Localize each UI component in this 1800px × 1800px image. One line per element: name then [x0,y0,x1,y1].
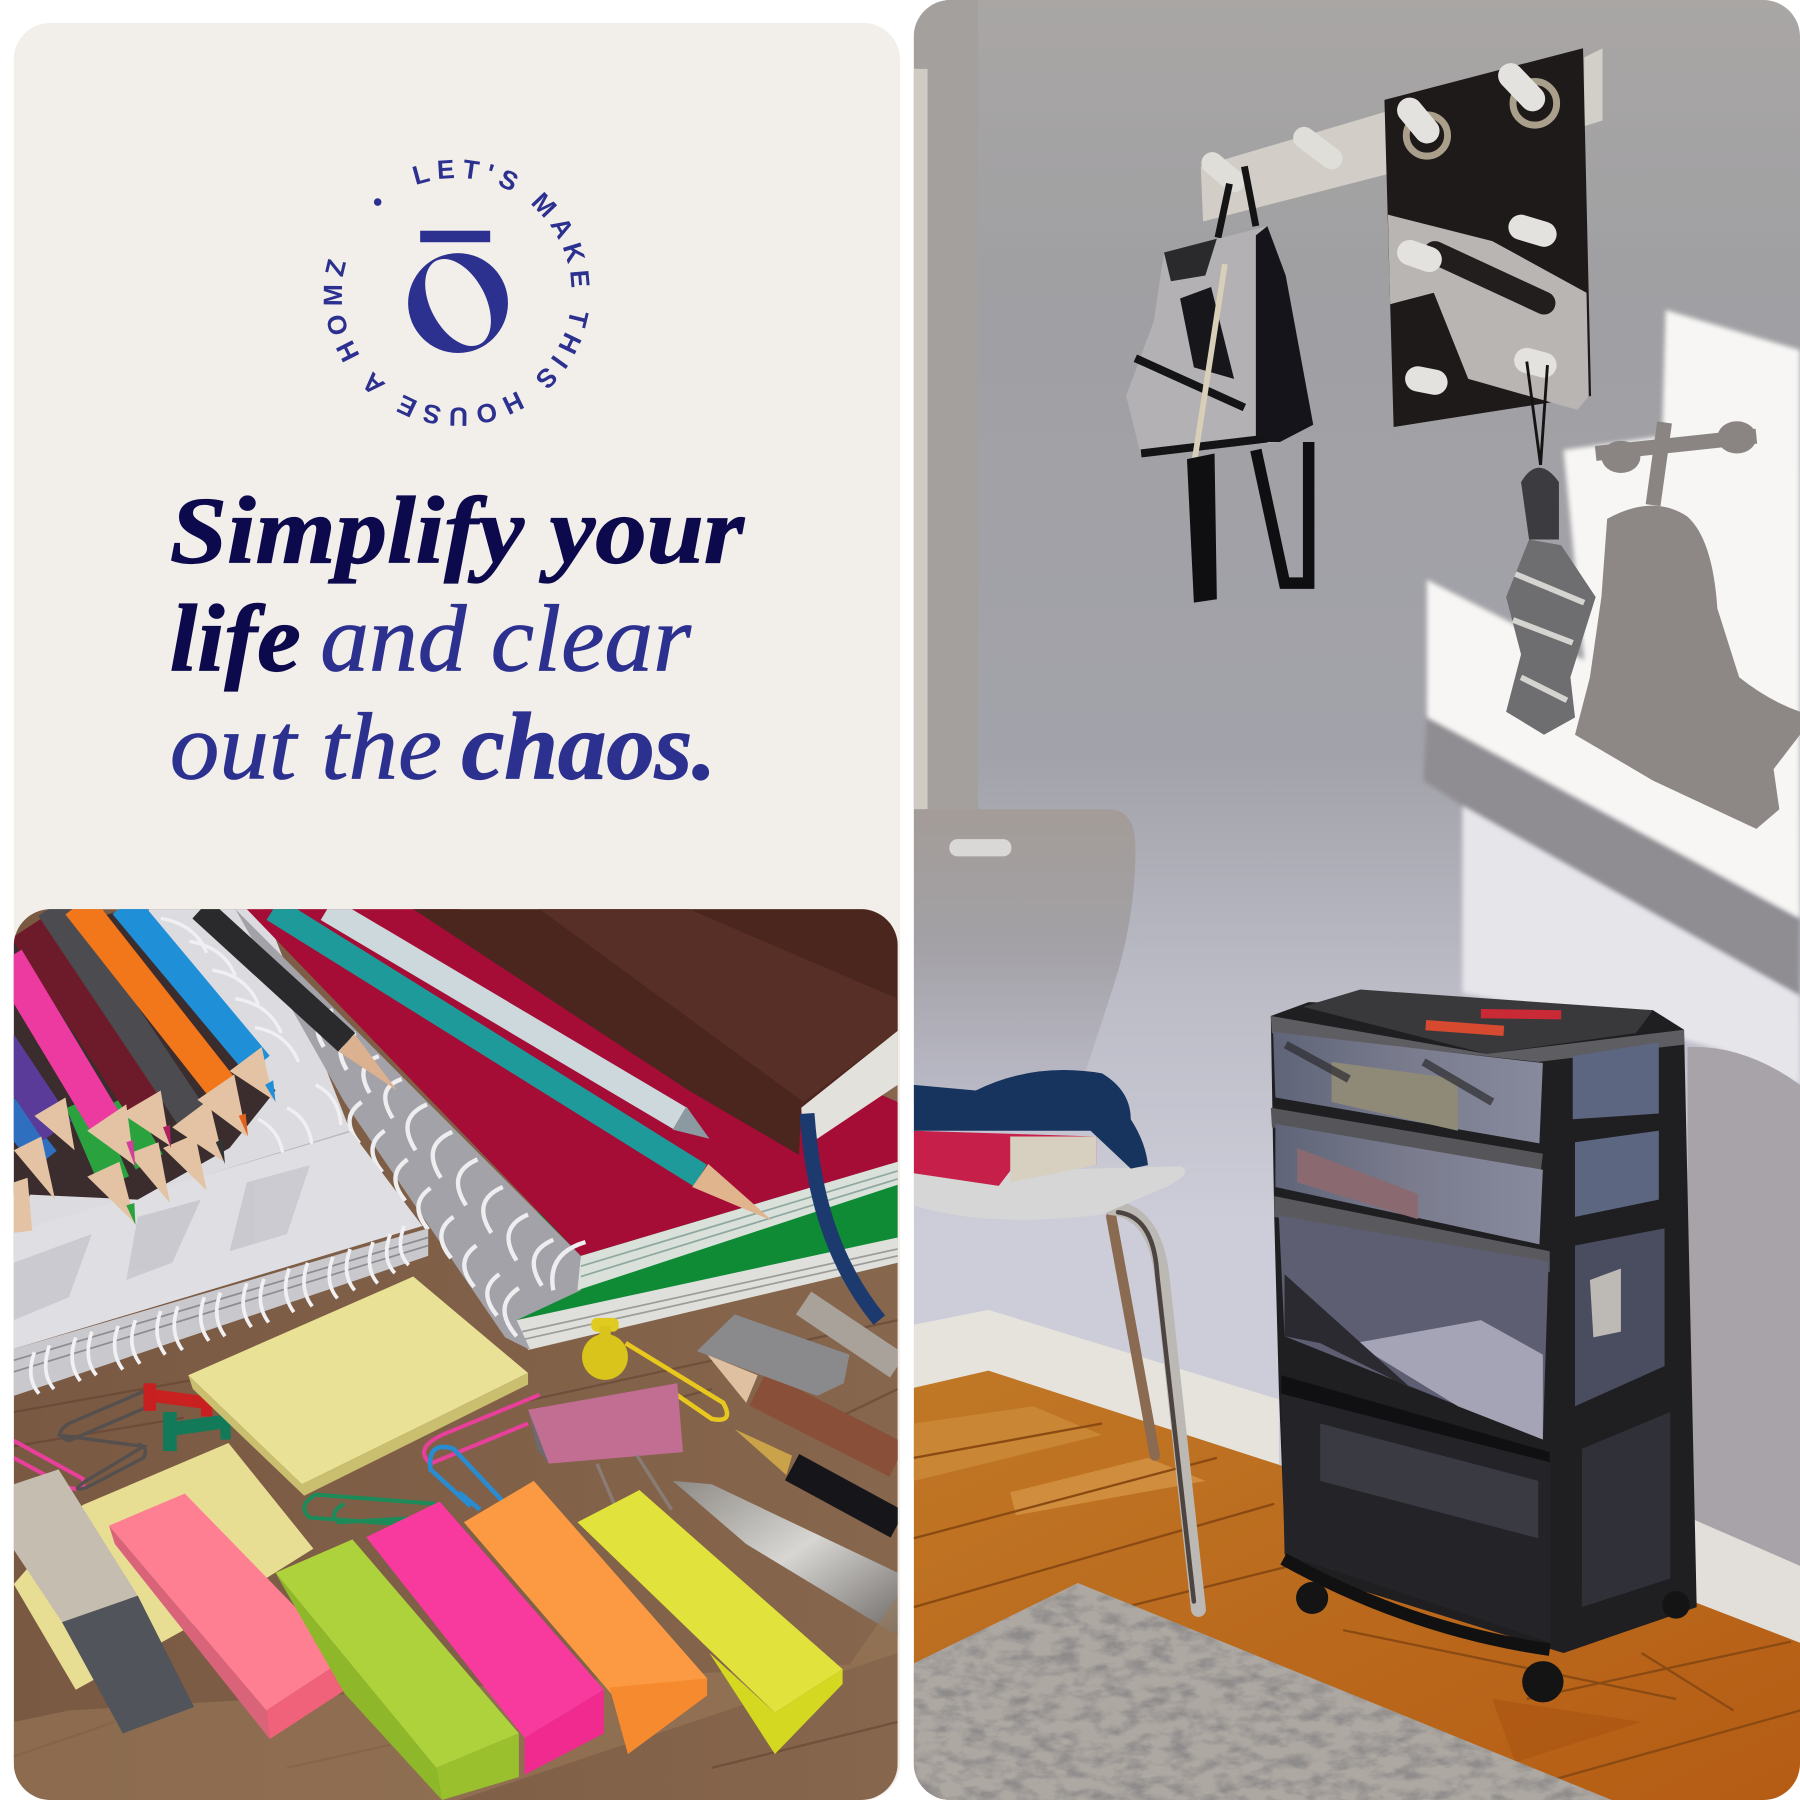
green push pin [163,1410,231,1451]
logo dot separator [374,198,381,206]
front white notebook [14,1132,428,1396]
headline line 2 regular: and clear [320,585,692,691]
silver pen [673,1481,898,1636]
blue paperclip [430,1447,505,1510]
wall [914,0,1800,1800]
white pen [327,909,709,1139]
headline line 2 bold: life [170,585,301,691]
panel: cream text card [14,23,900,1800]
yellow sticky pad [188,1277,528,1496]
drawer one [1273,1032,1543,1143]
door frame at left [914,0,978,809]
pencil sharpener [697,1314,849,1396]
spiral wire under pencils [161,918,341,1159]
headline [170,477,745,799]
floor plank lines [914,1423,1800,1800]
dark gap behind pencils [14,909,276,1200]
front notebook spiral [31,1226,409,1394]
pink binder clip [528,1383,683,1510]
side window four [1582,1412,1670,1607]
hook shadow on wall [1596,421,1756,505]
pencil bodies [0,905,258,1182]
red book [914,1131,1096,1186]
colored pencils bundle [0,905,276,1233]
pink sticky flag [109,1493,346,1739]
plastic drawer cart [1271,990,1697,1702]
cart base rail [1283,1559,1550,1650]
blue knit scarf [914,1070,1148,1169]
photo: room corner with storage cart [914,0,1800,1800]
pink large paperclip [424,1395,540,1464]
black pencil [201,909,397,1091]
chair legs [1111,1208,1198,1609]
drawer two [1271,1108,1543,1244]
chair handle slot [949,839,1011,856]
navy ribbon [807,1114,879,1320]
yellow sticky flag [577,1490,843,1754]
brown pencil [707,1355,898,1460]
rack pegs [1212,138,1332,181]
baseboard left [914,1310,1279,1465]
chair back [914,809,1135,1108]
black backpack [1126,166,1313,603]
black pen [735,1429,898,1524]
green paperclip [304,1495,436,1527]
folded umbrella [1506,362,1596,735]
sunlight patch lower [1462,806,1800,1085]
yellow push pin [582,1318,628,1380]
yellow sticky note under flags [14,1443,313,1690]
cart frame [1271,1002,1697,1653]
cart top rim [1271,1016,1684,1062]
back white notebook [29,909,350,1226]
grey patterned rug [914,1583,1612,1800]
wood grain [14,1320,898,1768]
green notebook [482,1185,898,1350]
teal pencil [273,909,771,1220]
wood rack [1201,48,1603,222]
top tray pens [1426,1014,1561,1031]
yellow paperclip [626,1343,727,1420]
headline line 1: Simplify your [170,477,745,583]
photo: stationery flat lay [0,905,898,1800]
logo macron bar [420,231,490,242]
drawer four [1281,1375,1551,1643]
sunlight patch upper [1427,310,1800,918]
dark paperclips [57,1389,149,1489]
side window one [1573,1042,1659,1119]
red push pin [143,1383,212,1417]
side window two [1575,1131,1659,1217]
pink paperclip [14,1441,84,1489]
panel pegs [1406,82,1557,156]
pencil lead points [126,1080,276,1225]
notebook spirals [317,1010,585,1336]
notebook shadow stripes [14,1165,310,1320]
logo: circular badge [324,160,590,426]
baseboard right [1675,1520,1800,1643]
shadowed wall band [1423,712,1800,996]
brown hardcover book [413,909,898,1155]
side window three [1575,1228,1665,1406]
chair seat [914,1166,1185,1220]
eraser [14,1469,194,1733]
wooden desk [14,909,898,1800]
logo letter o [408,248,508,357]
wall right of cart [1688,1047,1800,1568]
headline line 3 regular: out the [170,693,442,799]
lime sticky flag [276,1539,519,1800]
caster wheels [1296,1582,1690,1702]
silver pen top right [804,1303,898,1366]
headline line 3 bold: chaos. [461,693,716,799]
drawer three [1274,1196,1550,1440]
logo ring text: LET'S MAKE THIS HOUSE A HOMZ [324,160,590,426]
ruler [14,1596,898,1800]
spiral bound page edge [235,909,581,1350]
cart top tray [1303,990,1653,1054]
umbrella shadow [1575,506,1800,829]
magenta sticky flag [366,1502,604,1775]
black and white bag panel [1384,48,1591,427]
red notebook [247,909,898,1290]
orange sticky flag [464,1481,707,1754]
pencil wood tips [14,1047,273,1233]
hardwood floor [914,1371,1800,1800]
floor plank sheen [1010,1458,1205,1515]
